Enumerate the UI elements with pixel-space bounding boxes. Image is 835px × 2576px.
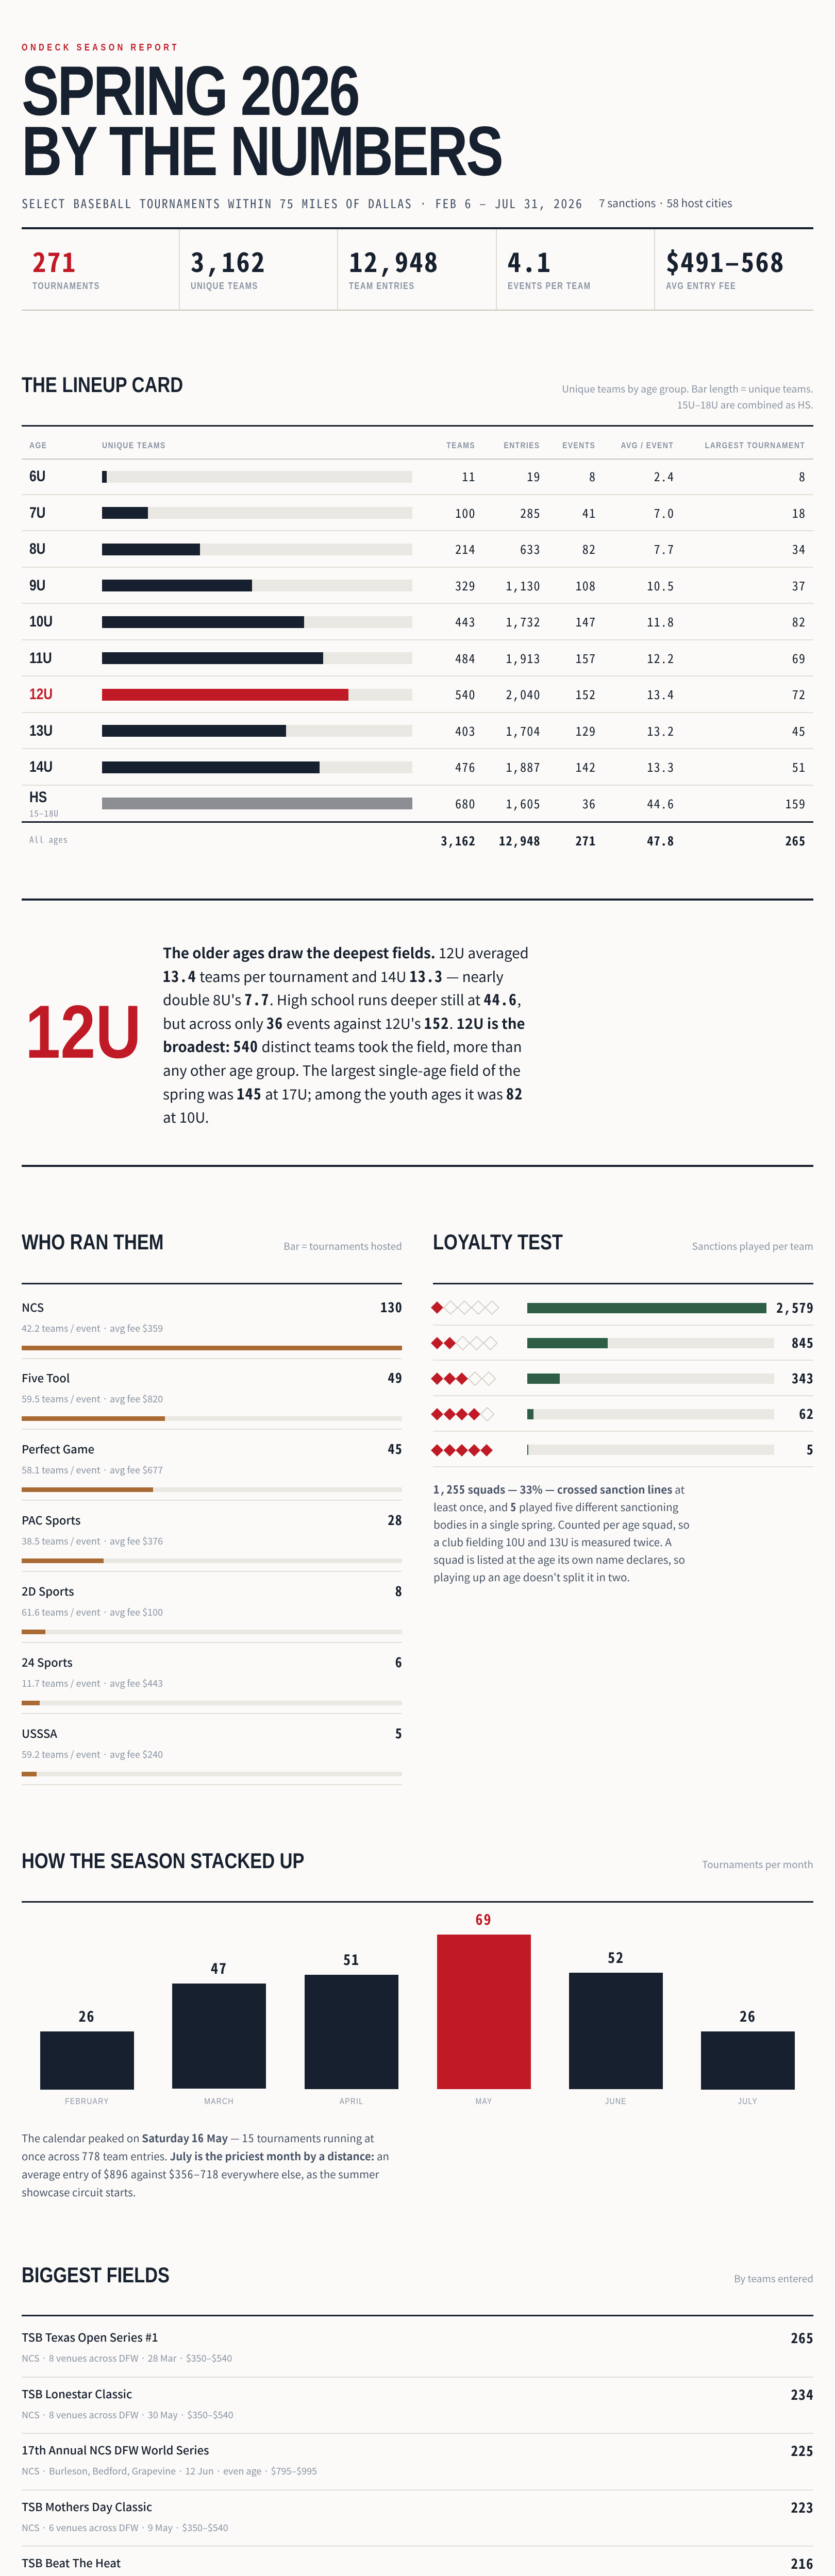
row: HS: 36 [582,793,596,812]
column: July: JULY [738,2096,758,2106]
stat: unique teams [180,229,338,310]
row: 14U: 14U [29,758,53,775]
callout: 12U [22,899,813,1167]
row: 10U: 443 [455,612,476,630]
callout text: at 10U. [163,1106,209,1127]
sanction: PAC Sports: PAC Sports [22,1512,80,1528]
field: TSB Texas Open Series #1: NCS · 8 venues across DFW · 28 Mar · $350–$540 [22,2351,232,2365]
sanction: NCS: 42.2 teams / event · avg fee $359 [22,1321,163,1335]
row: 11U: 11U [29,649,52,667]
row: 12U highlighted: 72 [792,685,806,703]
column: March: MARCH [204,2096,234,2106]
row: 6U: 19 [527,467,541,485]
row: 6U: 8 [799,467,806,485]
field: TSB Lonestar Classic: 234 [791,2383,814,2404]
field: 17th Annual NCS DFW World Series [22,2434,813,2490]
field: TSB Lonestar Classic: TSB Lonestar Classic [22,2385,132,2402]
field: TSB Mothers Day Classic: TSB Mothers Day Classic [22,2498,152,2514]
heading: LOYALTY TEST [433,1230,563,1254]
loyalty row: 4 sanctions [433,1396,813,1432]
row: all ages total: 265 [786,831,806,849]
row: 10U: 11.8 [647,612,674,630]
row: 6U: 6U [29,468,45,485]
stat: tournaments [22,229,180,310]
subtitle: SELECT BASEBALL TOURNAMENTS WITHIN 75 MILES OF DALLAS · FEB 6 – JUL 31, 2026 [22,194,583,212]
row: HS [29,788,806,819]
row: 12U highlighted [22,676,813,713]
sanction: PAC Sports: 38.5 teams / event · avg fee $376 [22,1534,163,1548]
row: 12U highlighted: 13.4 [647,685,674,703]
column: March: 47 [211,1958,227,1978]
column: April: APRIL [340,2096,363,2106]
callout text: 13.4 teams per tournament and 14U 13.3 — nearly [163,964,504,987]
field: TSB Mothers Day Classic: 223 [791,2497,814,2516]
loyalty row: 1 sanction [433,1284,813,1326]
row: all ages total: All ages [29,833,68,845]
loyalty row: 2 sanctions: 845 [792,1333,814,1352]
note: lineup [562,382,813,412]
row: 7U [22,495,813,531]
row: 12U highlighted: 2,040 [506,685,541,703]
row: 10U: 1,732 [506,612,541,631]
row: HS: 44.6 [647,793,674,812]
column: May peak [437,1909,531,2106]
season note: once across 778 team entries. July is the priciest month by a distance: an [22,2148,389,2164]
sanction: NCS: 130 [380,1297,403,1316]
field: TSB Beat The Heat [22,2547,813,2576]
column: July: 26 [740,2006,756,2026]
row: 13U: 13U [29,722,53,739]
heading: the lineup card: THE LINEUP CARD [22,372,183,397]
column: April: 51 [343,1949,360,1970]
row: 7U: 100 [455,503,476,521]
table: lineup card header: EVENTS [562,440,595,450]
row: 6U: 8 [589,467,596,485]
row: HS: HS [29,788,47,806]
row: 7U: 18 [792,503,806,521]
rule [22,2314,813,2316]
stat: events per team: 4.1 [508,241,552,280]
row: 12U highlighted: 12U [29,686,53,703]
stat strip [22,227,813,311]
row: HS: 159 [786,793,806,812]
column: May peak: MAY [475,2096,492,2106]
callout text [163,942,529,1127]
row: 8U: 82 [582,539,596,557]
loyalty row: 3 sanctions [433,1361,813,1396]
row: 13U [22,713,813,749]
sanction: 2D Sports [22,1572,402,1643]
sanction: NCS: NCS [22,1299,44,1315]
row: all ages total: 3,162 [441,831,476,850]
stat: events per team: EVENTS PER TEAM [508,281,591,291]
stat: avg entry fee: AVG ENTRY FEE [666,281,736,291]
callout text: broadest: 540 distinct teams took the field, more than [163,1035,522,1057]
sanction: NCS [22,1284,402,1359]
row: 11U: 484 [455,648,476,667]
note: Sanctions played per team [692,1239,813,1253]
column: February: 26 [79,2006,95,2026]
sanction: Perfect Game [22,1430,402,1501]
column: February: FEBRUARY [65,2096,109,2106]
sanction: 24 Sports: 6 [395,1652,403,1671]
panel: loyalty test [431,1230,814,1584]
row: 8U: 633 [520,539,541,557]
row: 6U: 2.4 [654,467,674,485]
field: TSB Mothers Day Classic [22,2490,813,2547]
column: June: 52 [608,1946,624,1967]
row: all ages total: 271 [576,831,596,849]
loyalty row: 4 sanctions: 62 [799,1404,814,1423]
sanction: 24 Sports: 24 Sports [22,1654,73,1670]
loyalty note: squad is listed at the age its own name declares, so [433,1551,685,1567]
row: 13U: 403 [455,721,476,739]
row: 10U: 147 [576,612,596,630]
callout text: double 8U's 7.7. High school runs deeper still at 44.6, [163,988,521,1010]
column: June [569,1946,663,2106]
title: BY THE NUMBERS [22,112,502,190]
field: TSB Lonestar Classic [22,2377,813,2434]
column: April [305,1949,398,2106]
table: lineup card header: UNIQUE TEAMS [102,440,166,450]
season note [22,2130,389,2199]
row: 9U: 10.5 [647,576,674,594]
stat: unique teams: UNIQUE TEAMS [191,281,258,291]
row: all ages total: 47.8 [647,831,674,849]
row: 11U: 69 [792,648,806,667]
table: lineup card header: TEAMS [446,440,475,450]
sanction: USSSA: USSSA [22,1725,57,1741]
row: 7U: 285 [520,503,541,521]
note: Bar = tournaments hosted [283,1239,402,1253]
field: TSB Beat The Heat: 216 [791,2553,814,2573]
row: 8U: 8U [29,540,45,557]
sanction: Perfect Game: 58.1 teams / event · avg fee $677 [22,1463,163,1477]
row: 11U: 157 [576,648,596,667]
row: 13U: 1,704 [506,721,541,740]
row: 14U: 13.3 [647,757,674,775]
stat: avg entry fee: $491–568 [666,241,785,280]
callout text: but across only 36 events against 12U's 152. 12U is the [163,1011,525,1033]
row: 10U: 10U [29,613,53,630]
sanction: Five Tool: Five Tool [22,1369,70,1386]
stat: team entries [338,229,497,310]
row: 11U [22,640,813,676]
row: 8U: 214 [455,539,476,557]
row: 13U: 129 [576,721,596,739]
field: TSB Lonestar Classic: NCS · 8 venues across DFW · 30 May · $350–$540 [22,2408,233,2421]
note: lineup: 15U–18U are combined as HS. [677,398,813,412]
row: 9U [22,568,813,604]
row: 8U [22,531,813,568]
field: 17th Annual NCS DFW World Series: NCS · Burleson, Bedford, Grapevine · 12 Jun · even age · $795–$995 [22,2464,317,2478]
sanction: Five Tool: 59.5 teams / event · avg fee $820 [22,1392,163,1405]
stat: team entries: TEAM ENTRIES [349,281,415,291]
eyebrow: ONDECK SEASON REPORT [22,42,179,53]
table: lineup card header: LARGEST TOURNAMENT [705,440,805,450]
field: 17th Annual NCS DFW World Series: 225 [791,2440,814,2460]
row: 13U: 45 [792,721,806,739]
loyalty note: 1,255 squads — 33% — crossed sanction lines at [433,1481,684,1497]
table: lineup card header [22,425,813,460]
loyalty row: 2 sanctions [433,1325,813,1361]
field: TSB Beat The Heat: TSB Beat The Heat [22,2554,121,2571]
loyalty note [433,1481,690,1584]
column: March [172,1958,266,2106]
column: June: JUNE [605,2096,627,2106]
row: 8U: 34 [792,539,806,557]
column: July [701,2006,795,2106]
sanctions note: 7 sanctions · 58 host cities [599,195,732,211]
row: 9U: 1,130 [506,576,541,595]
sanction: 2D Sports: 61.6 teams / event · avg fee $100 [22,1605,163,1619]
callout text: any other age group. The largest single-age field of the [163,1059,521,1080]
season note: average entry of $896 against $356–718 everywhere else, as the summer [22,2166,379,2182]
sanction: Five Tool: 49 [388,1368,403,1387]
row: 9U: 9U [29,577,45,594]
table: lineup card header: ENTRIES [504,440,540,450]
loyalty note: a club fielding 10U and 13U is measured twice. A [433,1534,672,1549]
loyalty note: bodies in a single spring. Counted per age squad, so [433,1516,690,1532]
field: TSB Texas Open Series #1 [22,2321,813,2377]
stat: events per team [497,229,655,310]
row: 7U: 41 [582,503,596,521]
row: all ages total: 12,948 [499,831,541,850]
rule [22,1283,402,1284]
row: 11U: 12.2 [647,648,674,667]
heading: how the season stacked up: HOW THE SEASON STACKED UP [22,1849,305,1873]
sanction: 24 Sports [22,1643,402,1714]
sanction: USSSA: 59.2 teams / event · avg fee $240 [22,1748,163,1761]
stat: tournaments: 271 [32,241,77,280]
season note: The calendar peaked on Saturday 16 May — 15 tournaments running at [22,2130,374,2146]
chart: tournaments per month [22,1901,813,2113]
note: biggest fields: By teams entered [734,2272,813,2285]
heading: biggest fields: BIGGEST FIELDS [22,2263,170,2287]
row: 8U: 7.7 [654,539,674,557]
stat: tournaments: TOURNAMENTS [32,281,100,291]
sanction: 24 Sports: 11.7 teams / event · avg fee $443 [22,1676,163,1690]
stat: team entries: 12,948 [349,241,439,280]
heading: WHO RAN THEM [22,1230,163,1254]
sanction: 2D Sports: 2D Sports [22,1583,74,1599]
table: lineup card header: AGE [29,440,47,450]
field: TSB Mothers Day Classic: NCS · 6 venues across DFW · 9 May · $350–$540 [22,2520,228,2534]
row: HS: 1,605 [506,793,541,812]
sanction: PAC Sports [22,1501,402,1572]
rule [433,1283,813,1284]
sanction: Perfect Game: Perfect Game [22,1440,94,1457]
sanction: PAC Sports: 28 [388,1510,403,1529]
header [22,42,732,212]
sanction: USSSA: 5 [395,1723,403,1742]
row: 11U: 1,913 [506,648,541,667]
note: lineup: Unique teams by age group. Bar length = unique teams. [562,382,813,396]
row: 9U: 108 [576,576,596,594]
loyalty row: 1 sanction: 2,579 [776,1298,814,1317]
row: 10U: 82 [792,612,806,630]
loyalty row: 5 sanctions: 5 [807,1439,814,1459]
column: May peak: 69 [476,1909,492,1929]
row: HS: 680 [455,793,476,812]
title [22,52,502,190]
row: 14U: 142 [576,757,596,775]
callout text: The older ages draw the deepest fields. 12U averaged [163,942,529,962]
field: TSB Texas Open Series #1: 265 [791,2327,814,2347]
field: 17th Annual NCS DFW World Series: 17th Annual NCS DFW World Series [22,2442,209,2458]
sanction: Five Tool [22,1359,402,1430]
season note: showcase circuit starts. [22,2184,136,2199]
loyalty row: 3 sanctions: 343 [792,1368,814,1387]
row: 9U: 329 [455,576,476,594]
loyalty note: playing up an age doesn't split it in two. [433,1569,630,1584]
row: 14U: 51 [792,757,806,775]
row: 9U: 37 [792,576,806,594]
row: 10U [22,604,813,640]
sanction: 2D Sports: 8 [395,1581,403,1600]
callout text: spring was 145 at 17U; among the youth ages it was 82 [163,1082,523,1104]
row: 13U: 13.2 [647,721,674,739]
callout figure: 12U [25,990,141,1074]
row: 12U highlighted: 152 [576,685,596,703]
row: 12U highlighted: 540 [455,685,476,703]
row: 14U: 1,887 [506,757,541,776]
row: 14U [22,749,813,785]
row: 6U: 11 [462,467,476,485]
field: TSB Texas Open Series #1: TSB Texas Open Series #1 [22,2329,158,2345]
table: lineup card header: AVG / EVENT [621,440,674,450]
stat: unique teams: 3,162 [191,241,266,280]
note: season: Tournaments per month [702,1857,813,1871]
row: 7U: 7.0 [654,503,674,521]
row: 6U [22,459,813,495]
column: February [40,2006,134,2106]
loyalty note: least once, and 5 played five different sanctioning [433,1498,678,1515]
title: SPRING 2026 [22,52,359,130]
row: 14U: 476 [455,757,476,775]
sanction: Perfect Game: 45 [388,1439,403,1458]
row: HS: 15–18U [29,806,59,819]
loyalty row: 5 sanctions [433,1432,813,1467]
panel: who ran them [22,1230,403,1785]
row: 7U: 7U [29,504,45,521]
row: all ages total [22,821,813,858]
sanction: USSSA [22,1714,402,1785]
